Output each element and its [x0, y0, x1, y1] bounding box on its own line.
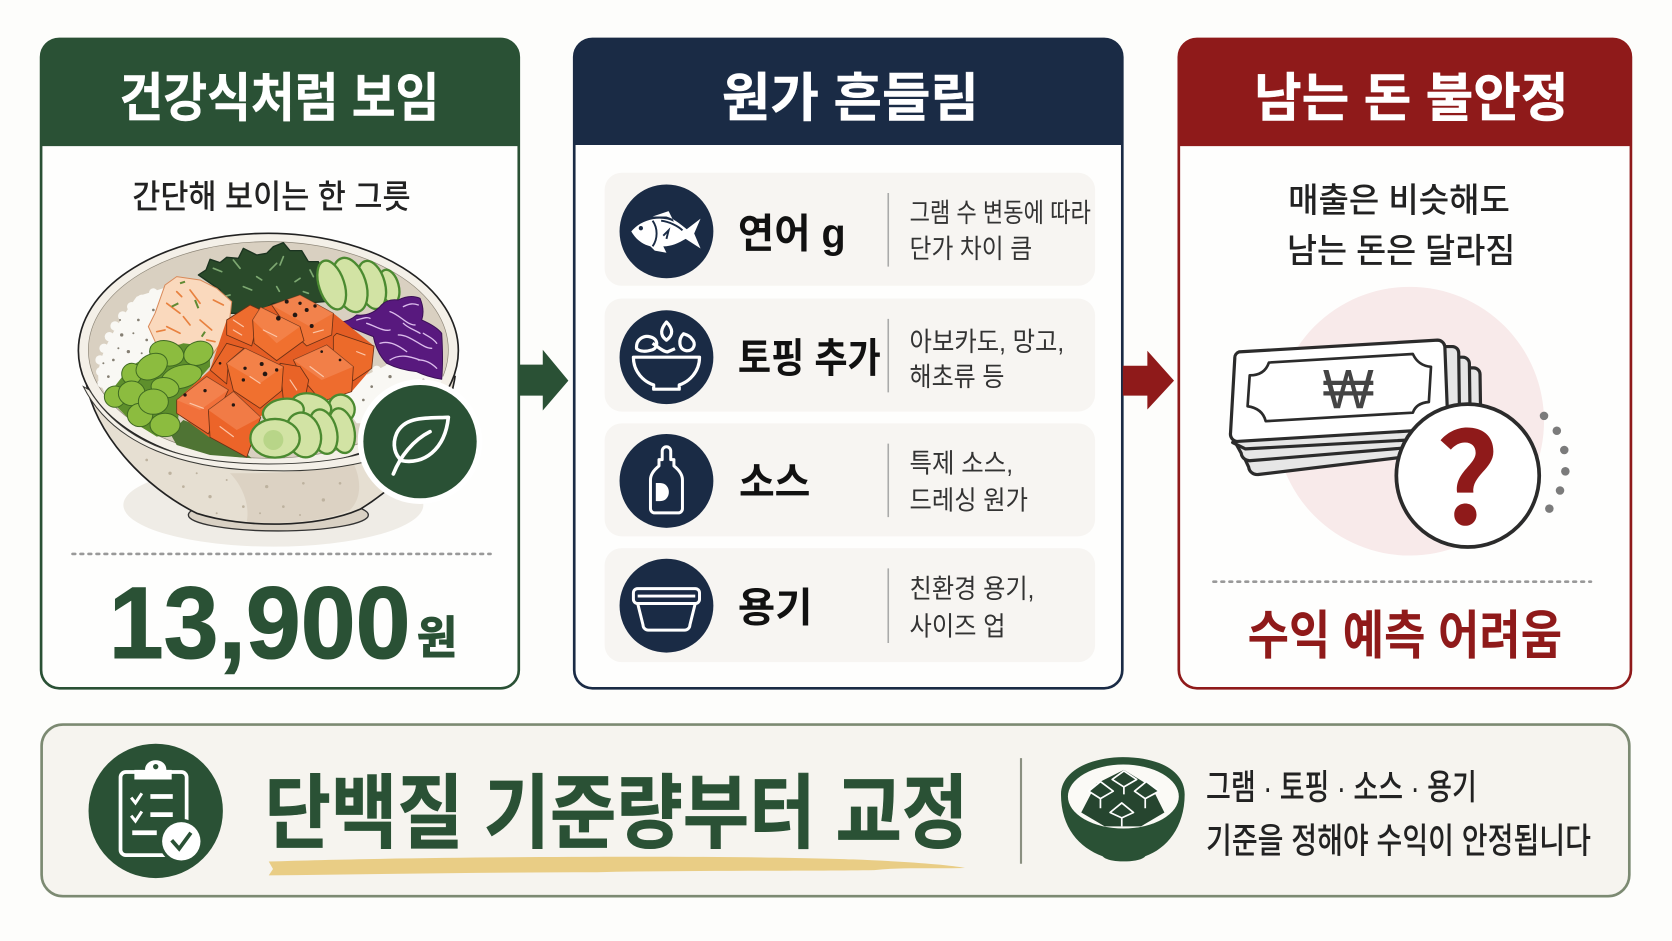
row: toppings: 아보카도, 망고,: [910, 327, 1064, 357]
panel header: red: [1178, 38, 1631, 146]
icon: clipboard checklist: [89, 744, 223, 878]
badge: leaf: [358, 379, 482, 504]
text: sales similar, profit differs: 남는 돈은 달라짐: [1287, 232, 1515, 270]
row: salmon grams: 연어 g: [738, 210, 846, 256]
row: sauce: [605, 423, 1095, 536]
row: salmon grams: 그램 수 변동에 따라: [910, 198, 1091, 228]
row: toppings: [605, 299, 1095, 412]
row: container: [605, 548, 1095, 662]
text: sales similar, profit differs: 매출은 비슷해도: [1288, 182, 1510, 220]
row: sauce: 소스: [739, 459, 810, 505]
text: sales similar, profit differs: [1287, 182, 1515, 270]
illustration: money stack with question mark: ?: [1435, 380, 1500, 562]
text: hard to predict profit: 수익 예측 어려움: [1248, 608, 1562, 666]
brush underline: [269, 857, 965, 875]
panel: unstable profit: [1178, 38, 1631, 688]
icon: sauce bottle: [650, 447, 682, 513]
price: 13,900 won: 원: [417, 614, 457, 664]
row: container: 친환경 용기,: [910, 574, 1034, 604]
row: container: 사이즈 업: [910, 612, 1006, 642]
price: 13,900 won: 13,900: [109, 565, 411, 680]
row: salmon grams: 단가 차이 큼: [910, 234, 1032, 264]
subtitle: simple bowl: 간단해 보이는 한 그릇: [132, 179, 411, 216]
row: container: 용기: [738, 585, 813, 631]
panel header: green: [41, 38, 519, 146]
arrow: green: [519, 350, 568, 411]
row: sauce: 특제 소스,: [910, 448, 1013, 478]
icon: bowl with tofu cubes: [1061, 757, 1185, 861]
row: salmon grams: [605, 173, 1095, 286]
illustration: money stack with question mark: [1230, 287, 1570, 562]
panel: cost fluctuation: [574, 38, 1123, 688]
icon: food container: [633, 589, 700, 630]
arrow: red: [1123, 351, 1174, 409]
panel: looks like health food: [41, 38, 519, 688]
text: set the standard: [1206, 769, 1591, 861]
panel header: navy: [574, 38, 1123, 145]
illustration: money stack with question mark: ₩: [1323, 358, 1374, 420]
icon: salad bowl: [633, 322, 700, 389]
heading: looks healthy: 건강식처럼 보임: [119, 70, 439, 128]
icon: fish: [631, 211, 701, 253]
illustration: poke bowl: [78, 233, 482, 547]
heading: unstable margin: 남는 돈 불안정: [1254, 70, 1569, 128]
panel: bottom conclusion: [42, 725, 1629, 896]
text: set the standard: 그램 · 토핑 · 소스 · 용기: [1206, 769, 1477, 808]
row: toppings: 해초류 등: [910, 362, 1004, 392]
heading: fix protein standard: 단백질 기준량부터 교정: [264, 769, 968, 859]
heading: cost fluctuates: 원가 흔들림: [722, 70, 979, 128]
row: sauce: 드레싱 원가: [910, 486, 1028, 516]
row: toppings: 토핑 추가: [738, 335, 881, 381]
